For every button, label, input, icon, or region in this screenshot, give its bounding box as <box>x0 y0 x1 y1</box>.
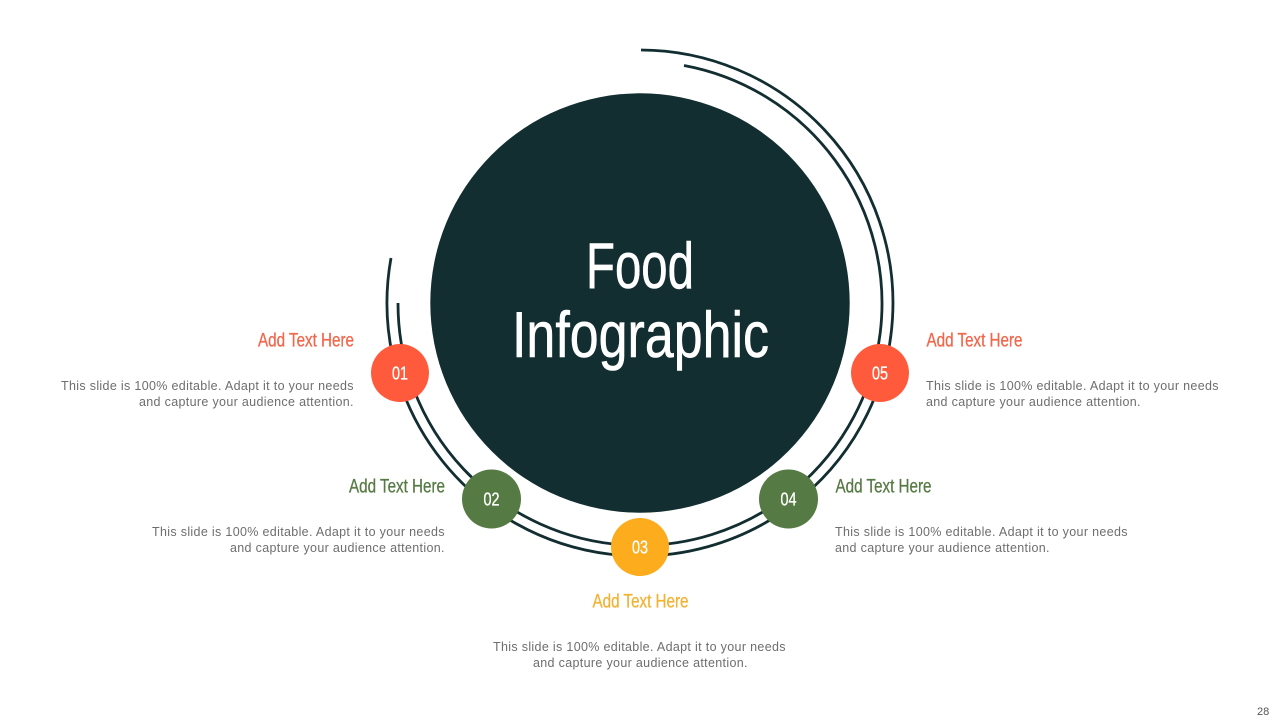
text block 01: This slide is 100% editable. Adapt it to your needs <box>61 379 354 393</box>
text block 03: This slide is 100% editable. Adapt it to your needs <box>493 640 786 654</box>
text block 02: Add Text Here <box>349 476 445 498</box>
text block 01: Add Text Here <box>258 330 354 352</box>
text block 05: This slide is 100% editable. Adapt it to your needs <box>926 379 1218 393</box>
title: Infographic <box>512 298 769 371</box>
text block 04 <box>835 476 1128 555</box>
node 02 <box>462 470 521 528</box>
text block 04: This slide is 100% editable. Adapt it to your needs <box>835 525 1128 539</box>
text block 04: and capture your audience attention. <box>835 541 1050 555</box>
text block 05: and capture your audience attention. <box>926 395 1140 409</box>
node 04 <box>759 470 818 528</box>
node 01 <box>371 344 429 402</box>
node 05 <box>851 344 909 402</box>
inner arc <box>398 66 882 545</box>
text block 05: Add Text Here <box>926 330 1022 352</box>
text block 03 <box>493 592 786 670</box>
text block 02: and capture your audience attention. <box>230 541 444 555</box>
title <box>512 229 769 371</box>
text block 01 <box>61 330 354 409</box>
node 04: 04 <box>780 490 796 510</box>
page number: 28 <box>1257 706 1269 718</box>
text block 01: and capture your audience attention. <box>139 395 354 409</box>
title: Food <box>586 229 694 302</box>
text block 05 <box>926 330 1218 409</box>
text block 02: This slide is 100% editable. Adapt it to your needs <box>152 525 444 539</box>
text block 03: Add Text Here <box>592 592 688 612</box>
text block 03: and capture your audience attention. <box>533 656 748 670</box>
node 05: 05 <box>872 364 888 384</box>
node 01: 01 <box>392 364 408 384</box>
text block 04: Add Text Here <box>836 476 932 498</box>
text block 02 <box>152 476 445 555</box>
central circle with title <box>430 93 850 513</box>
node 02: 02 <box>484 490 500 510</box>
node 03 <box>611 518 669 576</box>
node 03: 03 <box>632 538 648 558</box>
outer arc <box>387 50 893 556</box>
